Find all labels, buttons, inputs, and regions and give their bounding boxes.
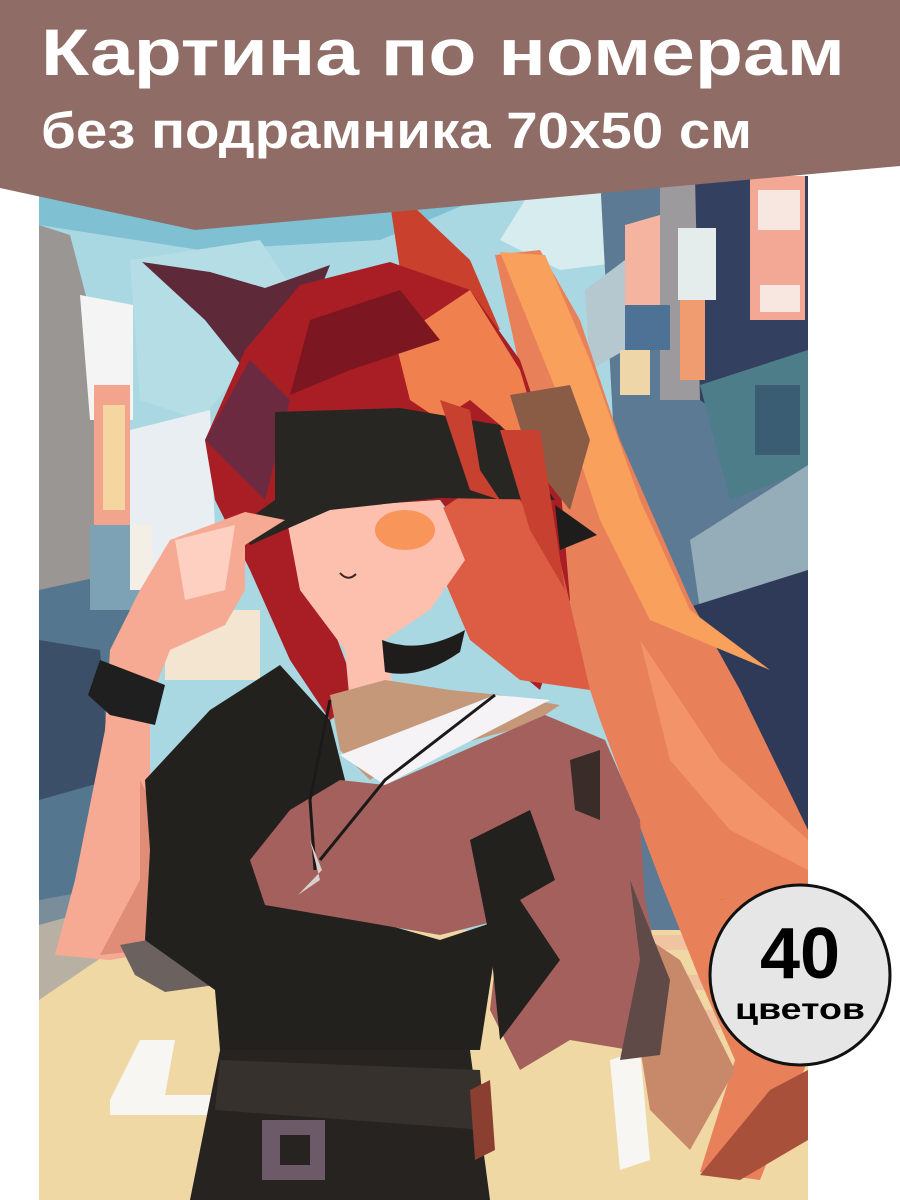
choker	[382, 630, 465, 674]
badge: 40 colours	[710, 885, 890, 1065]
watch	[88, 660, 165, 725]
badge: 40 colours: цветов	[735, 993, 865, 1026]
black shirt	[145, 665, 500, 1050]
mouth	[340, 573, 356, 578]
title: Картина по номерам	[41, 15, 845, 89]
belt and skirt	[190, 1050, 490, 1200]
cat ear right	[390, 203, 500, 330]
header banner	[0, 0, 900, 230]
necklace	[310, 695, 495, 870]
face and neck	[285, 500, 465, 705]
subtitle: без подрамника 70х50 см	[41, 102, 752, 159]
blindfold	[240, 408, 555, 545]
street background	[39, 176, 808, 1200]
cat ear left	[142, 262, 330, 370]
hair strands over blindfold	[440, 400, 565, 590]
brown top	[250, 715, 665, 1070]
belt buckle	[262, 1120, 325, 1180]
painting: anime girl with blindfold	[39, 176, 808, 1200]
ponytail	[495, 250, 808, 1060]
hair mass	[205, 262, 570, 720]
sleeve fringe	[120, 940, 210, 992]
hand and arm	[55, 512, 285, 960]
badge: 40 colours: 40	[760, 914, 840, 994]
collar and chest	[330, 680, 560, 780]
